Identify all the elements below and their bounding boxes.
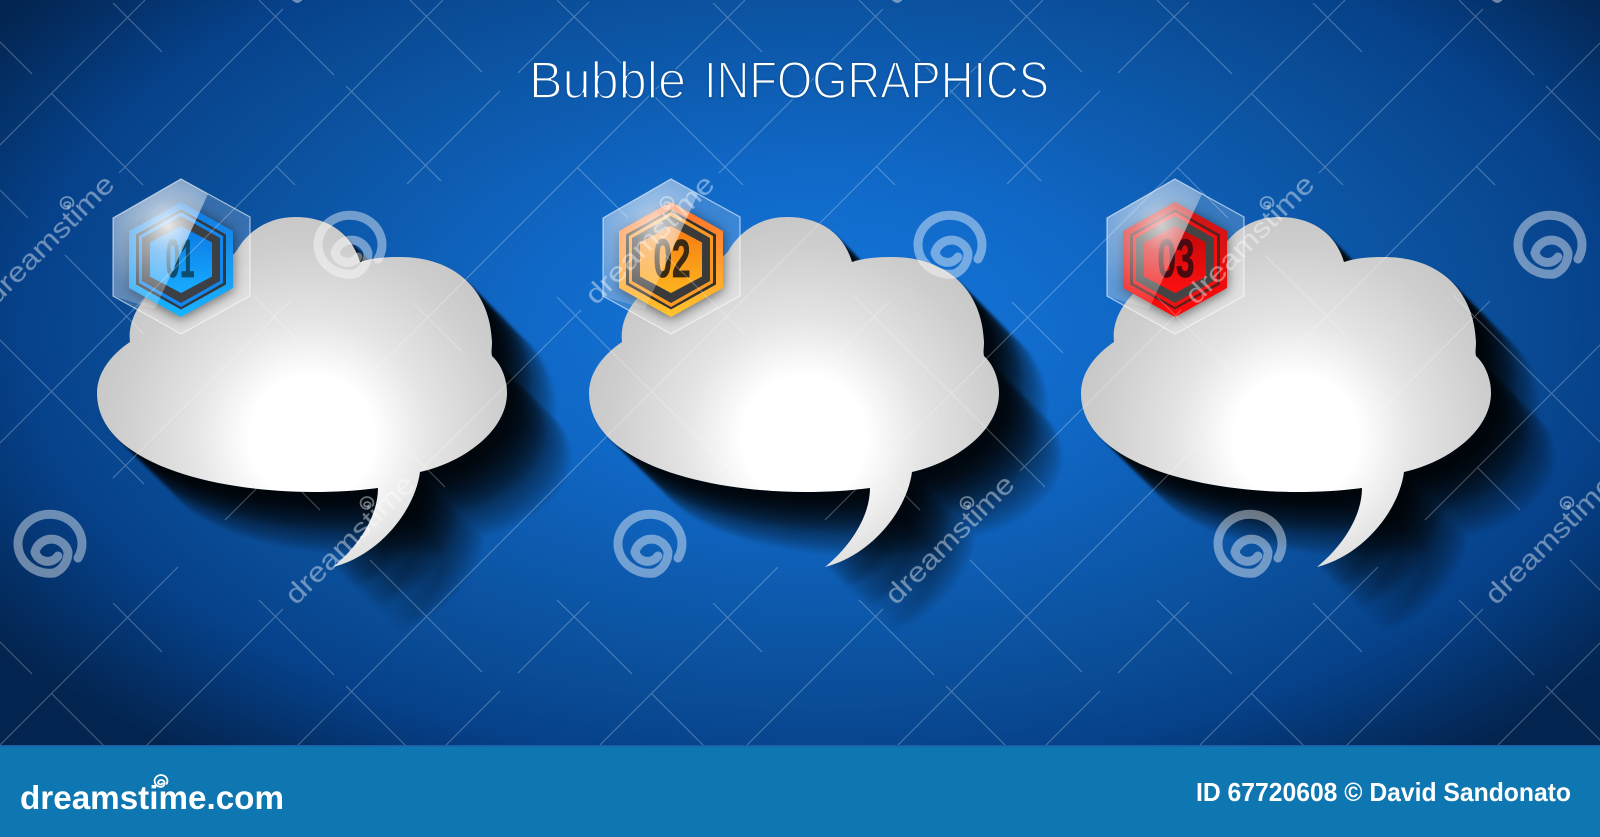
watermark spirals [18,215,1582,573]
glass hexagon [1107,179,1244,334]
title: INFOGRAPHICS [704,52,1049,110]
footer logo mark [155,775,167,787]
watermark copyright marks [61,197,1573,509]
number badge 01: 01 [166,229,194,289]
title [529,52,1049,110]
glass hexagon [113,179,250,334]
footer bar [0,745,1600,837]
speech cloud 2 [589,217,1063,631]
badge hexagon rings [1123,202,1227,317]
footer image id and credit: ID 67720608 © David Sandonato [1196,777,1571,807]
glass gloss [113,179,208,309]
speech cloud 1 [97,217,571,631]
watermark text: dreamstime [278,468,420,610]
badge hexagon rings [619,202,723,317]
badge number: 02 [654,229,690,289]
cloud 1 bubble [97,217,507,567]
cloud 1 long shadow [99,219,571,631]
speech cloud 3 [1081,217,1555,631]
cloud 3 bubble [1081,217,1491,567]
title: Bubble [529,52,686,110]
watermark text: dreamstime [578,168,720,310]
cloud 2 bubble [589,217,999,567]
number badge 03 [1107,179,1244,334]
footer logo text: dreamstime.com [20,779,284,816]
glass gloss [603,179,698,309]
badge number: 03 [1158,229,1194,289]
watermark text: dreamstime [878,468,1020,610]
cloud 2 long shadow [591,219,1063,631]
watermark text [0,0,1600,610]
badge hexagon rings [129,202,233,317]
glass hexagon [603,179,740,334]
glass gloss [1107,179,1202,309]
number badge 01 [113,179,250,334]
cloud 3 long shadow [1083,219,1555,631]
watermark text: dreamstime [1178,168,1320,310]
watermark text: dreamstime [1478,468,1600,610]
number badge 02 [603,179,740,334]
